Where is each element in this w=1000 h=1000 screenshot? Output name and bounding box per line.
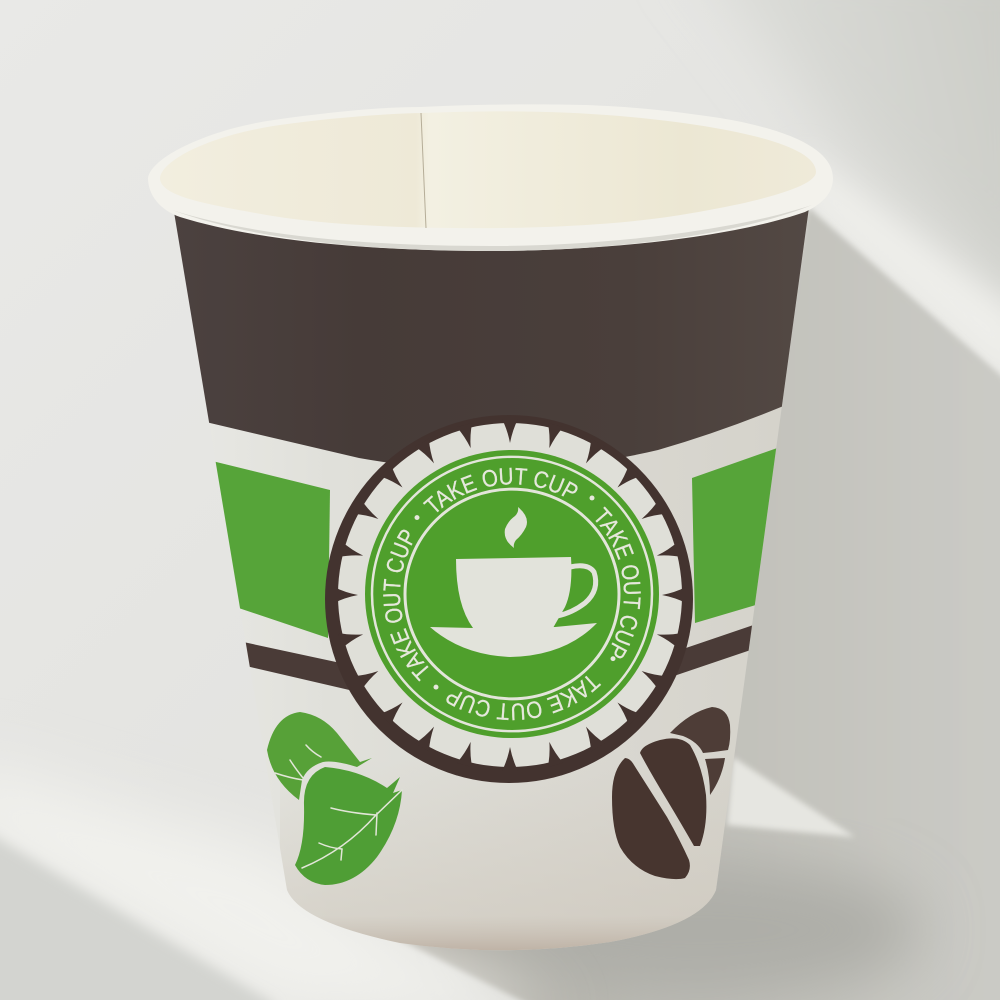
icon: steam	[505, 507, 527, 548]
icon: coffee beans	[612, 707, 730, 879]
upper right wall shade	[683, 0, 1000, 340]
right brown stripe	[676, 626, 752, 676]
ring bullets	[414, 496, 616, 690]
right green panel	[692, 448, 776, 623]
circular label text: TAKE OUT CUP	[446, 676, 602, 720]
floor shadow under cup	[480, 860, 920, 1000]
lower left bright strip	[0, 760, 560, 1000]
bean left half	[612, 758, 690, 879]
lower left diagonal shadow	[0, 822, 274, 1000]
cup base shading	[280, 834, 717, 950]
badge dark ring	[325, 415, 693, 783]
cup interior	[160, 111, 816, 228]
brown top band	[174, 210, 809, 462]
light band above cup shadow	[800, 150, 1000, 392]
rim lower shading	[172, 205, 812, 251]
circular label text: TAKE OUT CUP	[596, 506, 641, 658]
back bean top half	[670, 707, 730, 753]
printed wrap	[160, 190, 830, 692]
bean right half	[640, 738, 706, 846]
leaf veins	[275, 745, 402, 868]
circular label text	[383, 468, 641, 720]
back leaf	[267, 712, 372, 800]
left green panel	[216, 462, 330, 638]
paper cup	[148, 104, 833, 950]
front leaf	[295, 767, 402, 885]
cup shadow on the wall and floor	[400, 207, 1000, 1000]
left brown stripe	[246, 642, 350, 690]
badge	[325, 415, 693, 783]
icon: saucer	[430, 623, 597, 657]
back bean lower half	[705, 758, 725, 795]
cup rim	[148, 104, 833, 251]
inner seam	[421, 113, 426, 228]
cup body	[172, 200, 810, 950]
circular label text: TAKE OUT CUP	[422, 468, 578, 512]
circular label text: TAKE OUT CUP	[383, 530, 428, 682]
green seal with rings	[365, 450, 659, 738]
icon: cup bowl	[456, 557, 571, 628]
gear	[334, 419, 686, 771]
icon: cup handle	[557, 566, 596, 616]
icon: coffee cup with steam	[430, 507, 597, 657]
lit patch beside the cup	[727, 757, 855, 837]
icon: leaves	[267, 712, 402, 885]
